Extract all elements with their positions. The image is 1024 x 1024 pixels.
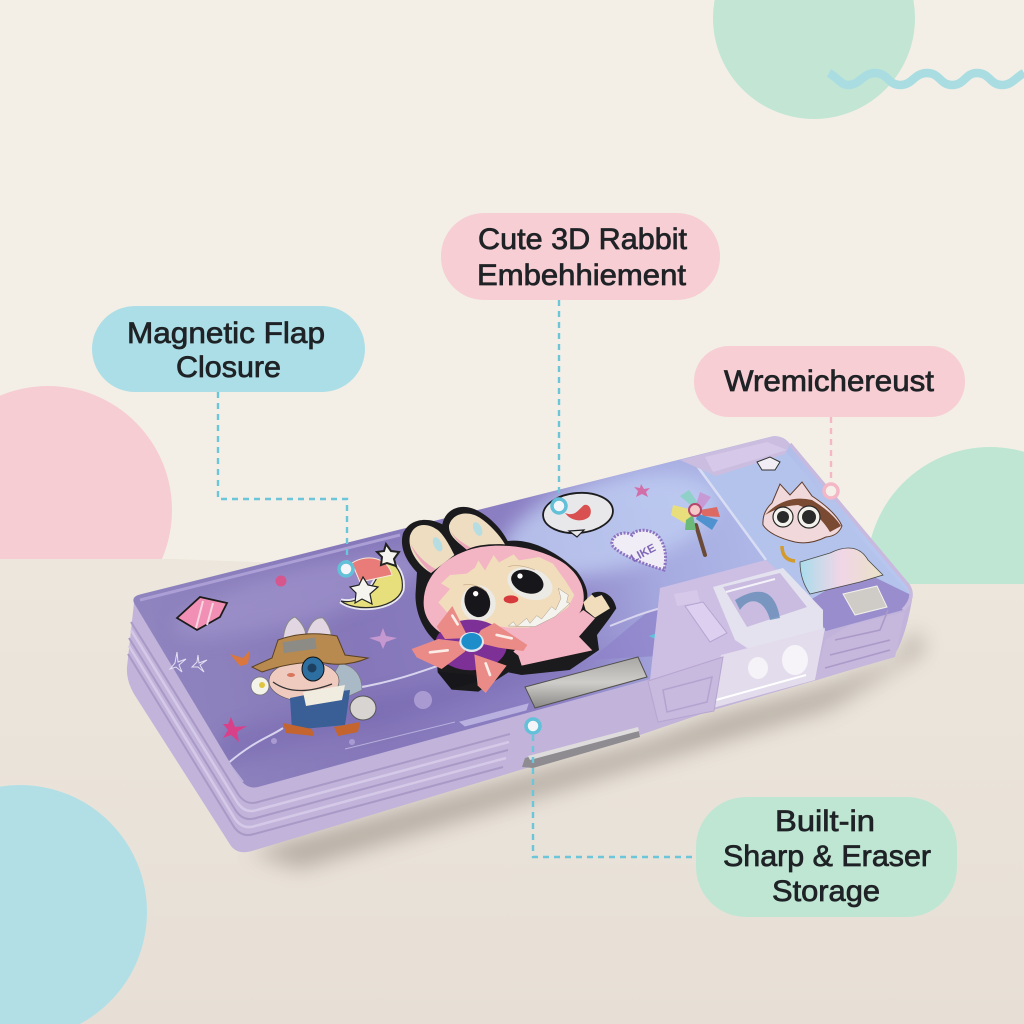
pinwheel	[412, 606, 527, 693]
right clear panel	[702, 463, 792, 576]
pinwheel base	[438, 672, 480, 689]
square latch	[648, 657, 723, 722]
hand	[583, 594, 610, 618]
marker	[552, 499, 566, 513]
decorative wavy line	[829, 73, 1024, 85]
lid top face	[120, 430, 920, 800]
label: built-in storage: Storage	[772, 875, 880, 908]
sticker: pink sparkle	[634, 484, 650, 497]
label: built-in storage	[696, 797, 957, 917]
lower metal clip	[522, 727, 640, 768]
teeth	[508, 588, 570, 627]
pencil case	[120, 430, 925, 868]
label: wremichereust: Wremichereust	[724, 365, 935, 398]
decorative circle: pink	[0, 386, 172, 634]
ears	[409, 525, 454, 573]
label: cute 3d rabbit: Embehhiement	[477, 259, 687, 292]
upper metal clip	[525, 657, 647, 708]
nose	[504, 595, 518, 603]
case shadow	[250, 630, 925, 868]
sharpener block	[713, 628, 825, 708]
marker	[339, 562, 353, 576]
sticker: pink star	[223, 717, 247, 742]
eraser	[674, 590, 700, 606]
curve lines	[226, 607, 665, 765]
small metal clip	[843, 586, 887, 615]
label: built-in storage: Sharp & Eraser	[723, 840, 931, 873]
floor	[0, 559, 1024, 1024]
label: magnetic flap closure: Magnetic Flap	[127, 317, 325, 350]
label: magnetic flap closure: Closure	[176, 351, 281, 384]
label: built-in storage: Built-in	[775, 805, 875, 838]
sticker: pinwheel flower	[671, 490, 720, 555]
decorative circle: green top	[713, 0, 915, 119]
connector: rabbit embellishment	[552, 300, 566, 513]
decorative circle: green right	[867, 447, 1024, 693]
sticker: blue sparkle	[649, 626, 672, 647]
eyes	[457, 581, 500, 625]
lid dots	[414, 691, 432, 709]
clear lid	[713, 568, 823, 652]
lid highlights	[183, 552, 416, 636]
label: magnetic flap closure	[92, 306, 365, 392]
connector: built-in storage	[526, 719, 695, 857]
sticker: white sparkles	[170, 652, 207, 672]
connector: magnetic flap	[218, 392, 353, 576]
label: wremichereust	[694, 346, 965, 417]
rabbit embellishment	[402, 507, 616, 693]
sticker: lavender star	[369, 628, 397, 649]
case body	[127, 436, 912, 852]
right rim	[790, 444, 911, 610]
decorative circle: blue	[0, 785, 147, 1024]
sticker: moon and stars	[341, 544, 402, 608]
arm and body	[513, 610, 595, 666]
sticker: pink dot	[276, 576, 286, 586]
sticker: small rabbit on unicorn	[763, 482, 883, 594]
rabbit outline	[402, 507, 616, 692]
right end	[815, 610, 905, 680]
sticker: speech bubble	[541, 490, 615, 537]
sticker: pink note	[177, 597, 227, 630]
connector: wremichereust	[824, 417, 838, 498]
label: cute 3d rabbit	[441, 213, 720, 300]
marker	[526, 719, 540, 733]
label: cute 3d rabbit: Cute 3D Rabbit	[478, 223, 688, 256]
sharpener compartment	[650, 560, 825, 708]
top tab	[705, 442, 787, 472]
side stripes	[128, 622, 510, 835]
left edge glare	[232, 766, 244, 782]
head	[424, 546, 584, 642]
face	[438, 554, 574, 628]
front gleam	[345, 704, 528, 749]
sticker: boy in hat	[230, 617, 376, 736]
small white sticker	[757, 457, 780, 470]
top lavender band	[680, 436, 790, 476]
marker	[824, 484, 838, 498]
sticker: like heart: LIKE	[629, 542, 658, 565]
sticker: like heart	[612, 530, 666, 570]
